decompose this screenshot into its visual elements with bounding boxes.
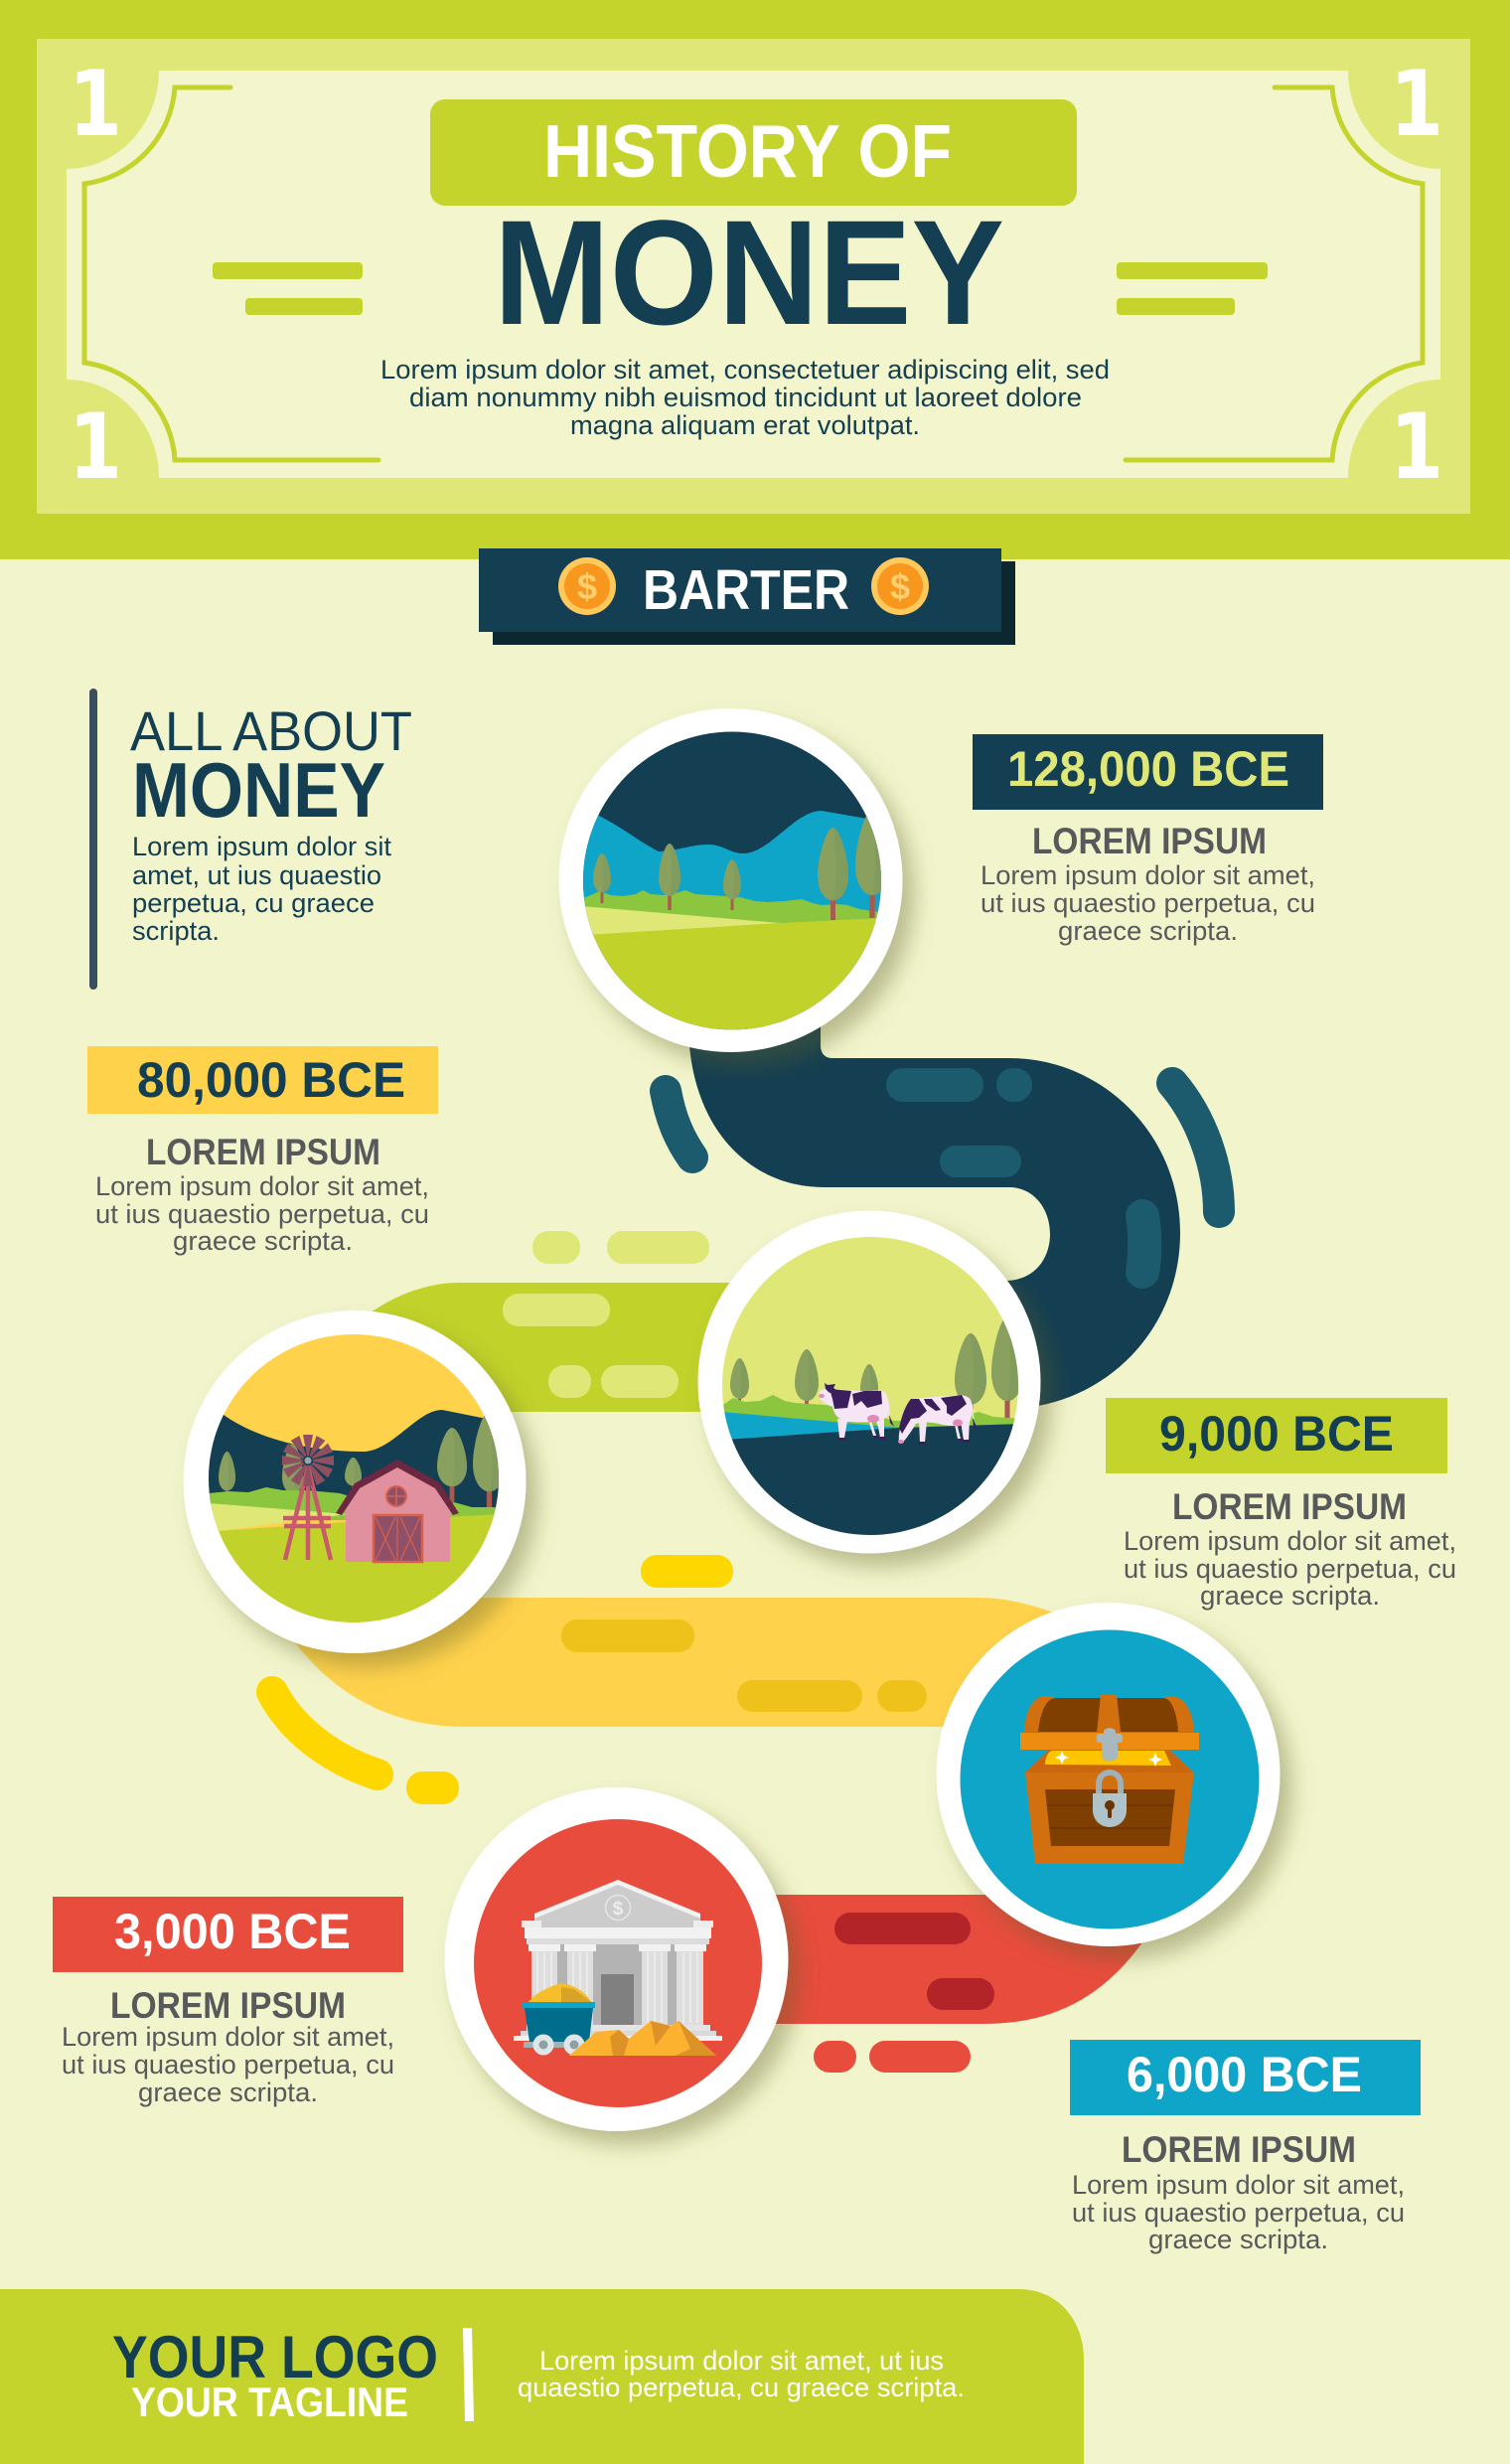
tagline: YOUR TAGLINE — [131, 2379, 408, 2425]
icon: cow grazing — [898, 1395, 979, 1445]
label: 128,000 BCE: graece scripta. — [1058, 916, 1238, 946]
label: 6,000 BCE: Lorem ipsum dolor sit amet, — [1072, 2170, 1405, 2200]
label: 128,000 BCE: Lorem ipsum dolor sit amet, — [981, 860, 1315, 890]
label: 9,000 BCE — [1106, 1398, 1456, 1611]
icon: mine cart — [523, 1983, 595, 2055]
label: 9,000 BCE: ut ius quaestio perpetua, cu — [1124, 1554, 1456, 1584]
label: 6,000 BCE: LOREM IPSUM — [1122, 2129, 1356, 2170]
path ribbon: green — [298, 1231, 795, 1412]
icon: coin right — [871, 557, 929, 615]
label: 128,000 BCE: 128,000 BCE — [1007, 741, 1289, 797]
title badge: HISTORY OF — [543, 109, 952, 193]
label: 6,000 BCE: graece scripta. — [1148, 2225, 1328, 2254]
header intro text: magna aliquam erat volutpat. — [570, 410, 920, 440]
label: 80,000 BCE: ut ius quaestio perpetua, cu — [95, 1199, 429, 1229]
icon: bank building — [514, 1880, 722, 2041]
label: 9,000 BCE: 9,000 BCE — [1159, 1406, 1394, 1462]
barter banner — [479, 548, 1015, 645]
footer — [0, 2289, 1084, 2464]
label: 128,000 BCE: LOREM IPSUM — [1032, 821, 1267, 861]
path ribbon: red — [695, 1895, 1142, 2073]
label: 3,000 BCE: ut ius quaestio perpetua, cu — [62, 2050, 394, 2079]
header intro text: Lorem ipsum dolor sit amet, consectetuer adipiscing elit, sed — [380, 355, 1110, 385]
title: money: MONEY — [494, 189, 1004, 356]
label: 80,000 BCE: LOREM IPSUM — [146, 1132, 380, 1172]
intro block: all about money: MONEY — [132, 746, 385, 834]
header intro text — [380, 355, 1110, 440]
intro block: all about money: ALL ABOUT — [130, 699, 412, 762]
icon: coin left: $ — [577, 566, 597, 607]
label: 9,000 BCE: graece scripta. — [1200, 1581, 1380, 1611]
icon: gold piles — [569, 2021, 716, 2056]
circle: farm with barn and windmill — [183, 1310, 527, 1653]
circle: bank — [445, 1787, 789, 2131]
intro block: all about money — [89, 689, 412, 990]
label: 80,000 BCE: graece scripta. — [173, 1226, 353, 1256]
icon: coin right: $ — [890, 566, 910, 607]
icon: treasure chest — [1020, 1695, 1199, 1864]
icon: barn — [336, 1460, 459, 1562]
icon: cow standing — [819, 1383, 894, 1441]
label: 128,000 BCE: ut ius quaestio perpetua, cu — [981, 888, 1315, 918]
label: 3,000 BCE: Lorem ipsum dolor sit amet, — [62, 2022, 394, 2052]
circle: cows on pasture — [697, 1210, 1041, 1554]
footer text: quaestio perpetua, cu graece scripta. — [518, 2373, 965, 2402]
barter banner: BARTER — [643, 558, 849, 622]
label: 6,000 BCE: ut ius quaestio perpetua, cu — [1072, 2198, 1405, 2228]
icon: coin left — [558, 557, 616, 615]
circle: landscape — [558, 708, 902, 1052]
footer text — [518, 2346, 965, 2402]
header banknote: 1 — [1390, 395, 1443, 500]
circle: treasure chest — [936, 1603, 1280, 1946]
intro block: all about money: scripta. — [132, 916, 220, 946]
label: 80,000 BCE: Lorem ipsum dolor sit amet, — [95, 1171, 429, 1201]
icon: bank building: $ — [613, 1899, 624, 1920]
label: 80,000 BCE: 80,000 BCE — [137, 1052, 405, 1108]
label: 128,000 BCE — [973, 734, 1323, 946]
header banknote: 1 — [69, 53, 122, 157]
label: 3,000 BCE: LOREM IPSUM — [110, 1985, 346, 2026]
footer text: Lorem ipsum dolor sit amet, ut ius — [539, 2346, 944, 2376]
icon: windmill — [282, 1435, 334, 1560]
label: 9,000 BCE: LOREM IPSUM — [1172, 1486, 1407, 1527]
label: 80,000 BCE — [87, 1046, 438, 1256]
intro block: all about money: amet, ut ius quaestio — [132, 860, 381, 890]
header banknote: 1 — [1390, 53, 1443, 157]
header banknote — [0, 0, 1510, 559]
header banknote: 1 — [69, 395, 122, 500]
label: 6,000 BCE: 6,000 BCE — [1127, 2047, 1362, 2102]
label: 6,000 BCE — [1070, 2040, 1421, 2254]
title badge — [430, 99, 1077, 206]
header intro text: diam nonummy nibh euismod tincidunt ut laoreet dolore — [409, 383, 1082, 412]
logo: YOUR LOGO — [112, 2324, 438, 2390]
label: 3,000 BCE — [53, 1897, 403, 2107]
intro block: all about money: Lorem ipsum dolor sit — [132, 832, 391, 861]
path ribbon: dark — [666, 1023, 1219, 1409]
label: 3,000 BCE: graece scripta. — [138, 2078, 318, 2107]
label: 3,000 BCE: 3,000 BCE — [114, 1904, 351, 1959]
intro block: all about money: perpetua, cu graece — [132, 888, 375, 918]
label: 9,000 BCE: Lorem ipsum dolor sit amet, — [1124, 1526, 1456, 1556]
path ribbon: yellow — [272, 1555, 1093, 1804]
